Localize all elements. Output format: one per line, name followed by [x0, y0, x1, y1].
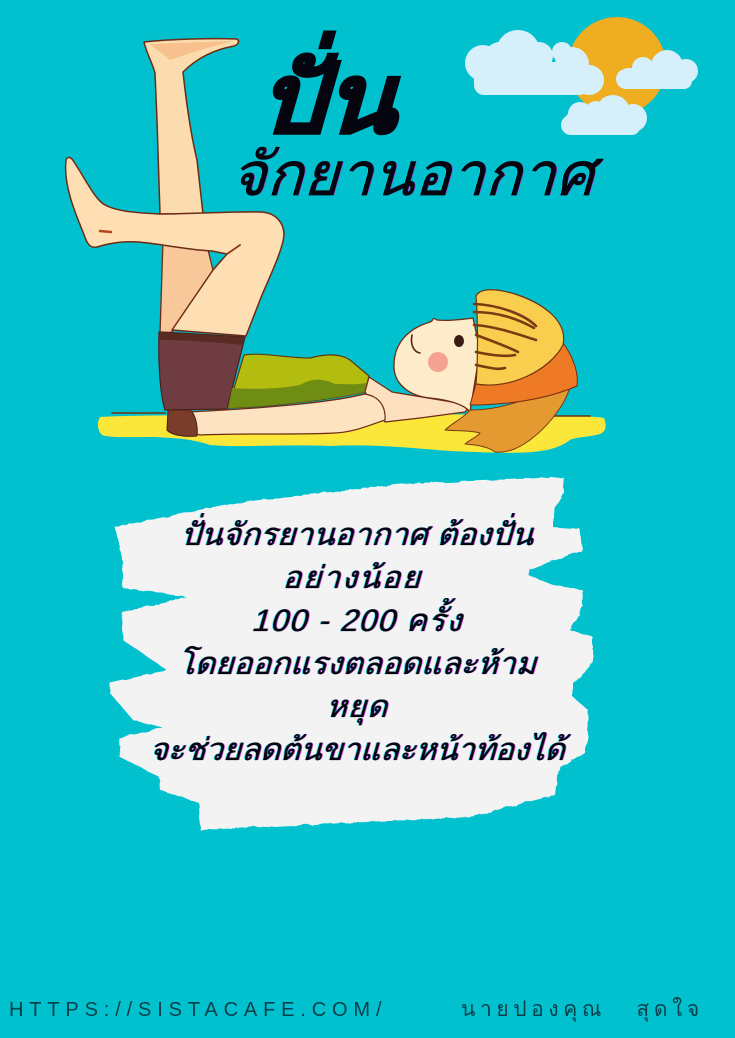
green top shadow [228, 380, 366, 408]
line 6: จะช่วยลดต้นขาและหน้าท้องได้ [147, 732, 573, 767]
icon: exercise mat [98, 414, 606, 453]
upper raised leg [144, 39, 238, 214]
footer: author: นายปองคุณ สุดใจ [461, 998, 704, 1021]
green top [228, 354, 369, 408]
icon: lower cloud [561, 95, 647, 135]
hair band [470, 343, 577, 405]
hand [167, 410, 197, 436]
footer: website: HTTPS://SISTACAFE.COM/ [9, 999, 387, 1021]
title: ปั่น: ปั่น [252, 46, 420, 153]
shorts [159, 332, 245, 410]
mat edge line [112, 413, 590, 416]
line 3: 100 - 200 ครั้ง [249, 603, 471, 638]
line 2: อย่างน้อย [280, 560, 430, 595]
fringe strands [474, 304, 536, 369]
line 1: ปั่นจักรยานอากาศ ต้องปั่น [179, 517, 541, 552]
knee fold line [227, 245, 240, 254]
thigh and raised foot [66, 157, 284, 336]
foot shading [150, 41, 234, 60]
line 5: หยุด [324, 689, 396, 724]
subtitle: จักยานอากาศ: จักยานอากาศ [227, 141, 609, 208]
ankle mark [100, 231, 111, 232]
icon: large cloud [465, 30, 604, 95]
text block: instructions [147, 513, 573, 767]
brow [411, 335, 420, 353]
cheek [428, 352, 448, 372]
figure: woman doing air cycling [66, 39, 590, 452]
face [394, 318, 480, 412]
shin below crossed leg [160, 240, 213, 334]
icon: sun [568, 17, 666, 115]
fringe hair [476, 290, 564, 385]
back hair [445, 376, 570, 452]
neck [365, 377, 470, 422]
shorts waistband [159, 332, 245, 345]
icon: right cloud [616, 50, 698, 89]
brush stroke panel [110, 477, 593, 830]
arm [187, 394, 385, 435]
line 4: โดยออกแรงตลอดและห้าม [176, 646, 544, 681]
eye [454, 335, 464, 347]
